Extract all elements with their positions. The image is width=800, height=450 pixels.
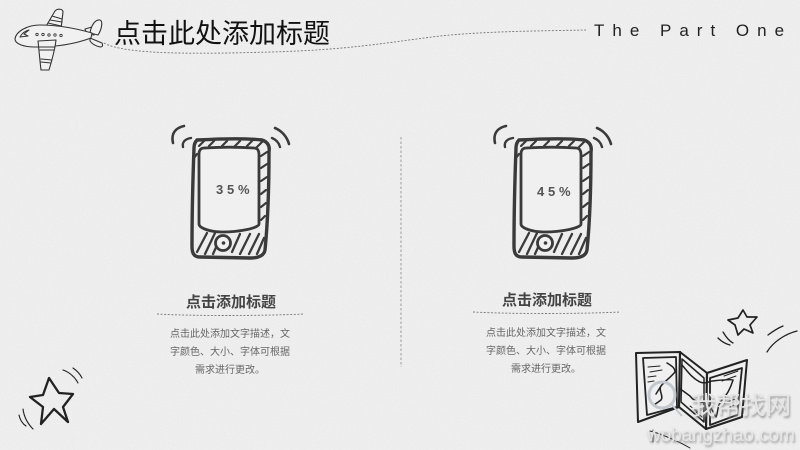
watermark text: 我帮找网 (691, 392, 791, 420)
right heading: 点击添加标题 (502, 291, 592, 309)
left body text: 字颜色、大小、字体可根据 (170, 345, 290, 358)
section label: The Part One (594, 21, 792, 40)
left body text: 需求进行更改。 (195, 363, 265, 376)
left heading: 点击添加标题 (186, 293, 276, 311)
left body text: 点击此处添加文字描述，文 (170, 327, 290, 340)
icon: airplane (15, 9, 103, 70)
icon: left phone (172, 126, 289, 258)
watermark (646, 382, 795, 446)
icon: right phone (494, 126, 611, 258)
phone value: 45% (537, 184, 574, 199)
panel: left phone block (157, 126, 304, 376)
vertical divider (400, 137, 402, 367)
arrow: curved mark below map (650, 430, 690, 448)
left body text (170, 327, 290, 376)
icon: folded map (636, 352, 747, 429)
title: 点击此处添加标题 (114, 19, 330, 49)
watermark icon (649, 382, 682, 416)
phone value: 35% (216, 182, 253, 197)
icon: star with motion lines (19, 368, 82, 429)
right body text: 字颜色、大小、字体可根据 (486, 344, 606, 357)
watermark: wobangzhao.com (646, 425, 795, 446)
panel: right phone block (473, 126, 620, 375)
right body text: 需求进行更改。 (511, 362, 581, 375)
right body text: 点击此处添加文字描述，文 (486, 326, 606, 339)
dashed flight path (104, 30, 586, 53)
right body text (486, 326, 606, 375)
icon: small star with motion lines (718, 310, 797, 352)
